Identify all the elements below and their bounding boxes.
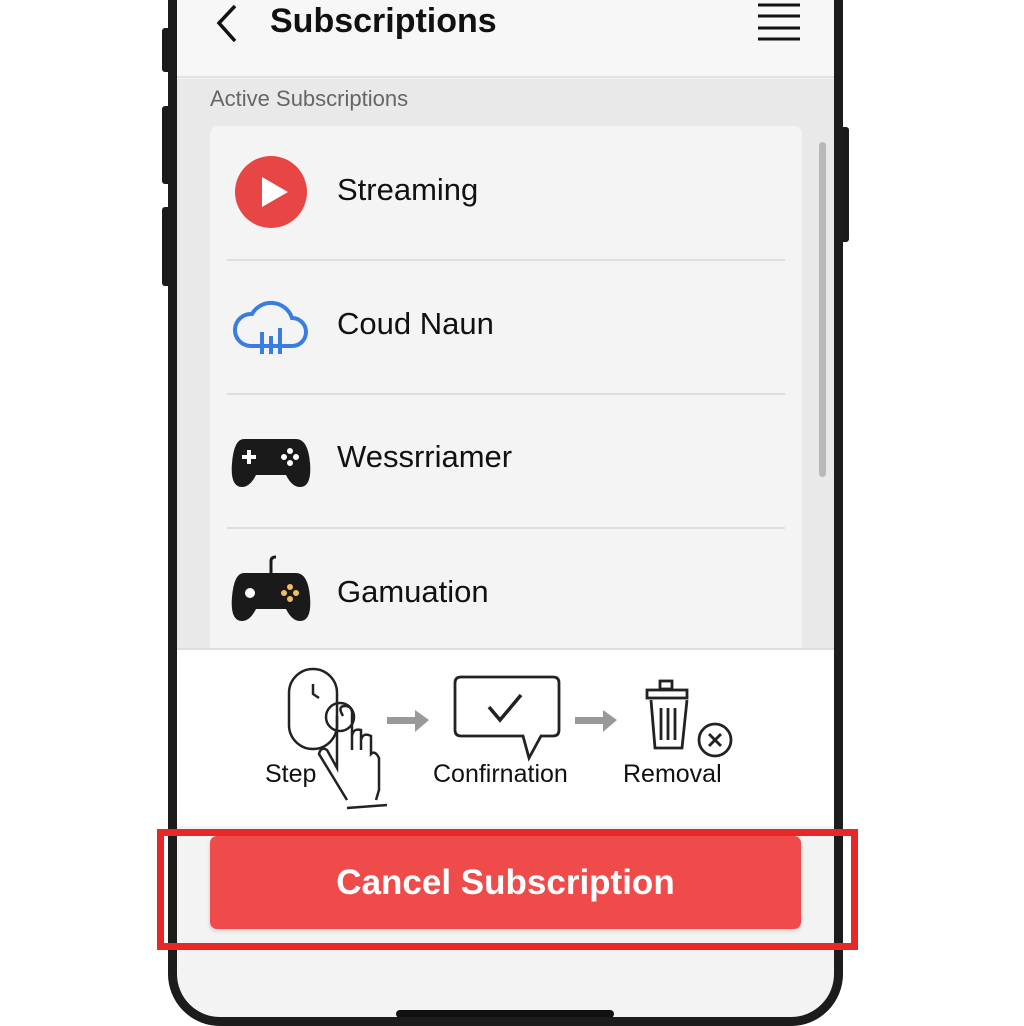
back icon xyxy=(216,4,236,42)
cancel button: Cancel Subscription xyxy=(336,863,675,902)
row: Wessrriamer: Wessrriamer xyxy=(337,439,512,474)
step labels: Step xyxy=(265,760,316,788)
scrollbar xyxy=(819,142,826,477)
row: Streaming: Streaming xyxy=(337,172,478,207)
title: Subscriptions xyxy=(270,2,497,40)
step flow panel: Removal xyxy=(623,760,722,788)
phone frame xyxy=(168,0,843,1026)
row: Streaming xyxy=(235,156,478,228)
header xyxy=(177,0,834,78)
row: Gamuation: Gamuation xyxy=(337,574,489,609)
row: Coud Naun: Coud Naun xyxy=(337,306,494,341)
icon: tap hand xyxy=(289,669,387,808)
arrow xyxy=(387,710,429,732)
row: Wessrriamer xyxy=(232,439,512,487)
red highlight box xyxy=(157,829,858,950)
card list xyxy=(210,126,802,656)
side buttons xyxy=(162,28,172,72)
row: Coud Naun xyxy=(232,300,494,354)
arrow xyxy=(575,710,617,732)
cancel button xyxy=(210,836,801,929)
icon: confirmation bubble xyxy=(455,677,559,758)
icon: trash with x xyxy=(647,681,731,756)
section label: Active Subscriptions xyxy=(210,86,408,111)
home indicator xyxy=(396,1010,614,1018)
step flow panel xyxy=(177,648,834,826)
gray list area xyxy=(177,79,834,649)
row: Gamuation xyxy=(232,556,489,621)
menu icon xyxy=(758,4,800,40)
step flow panel: Confirnation xyxy=(433,760,568,788)
